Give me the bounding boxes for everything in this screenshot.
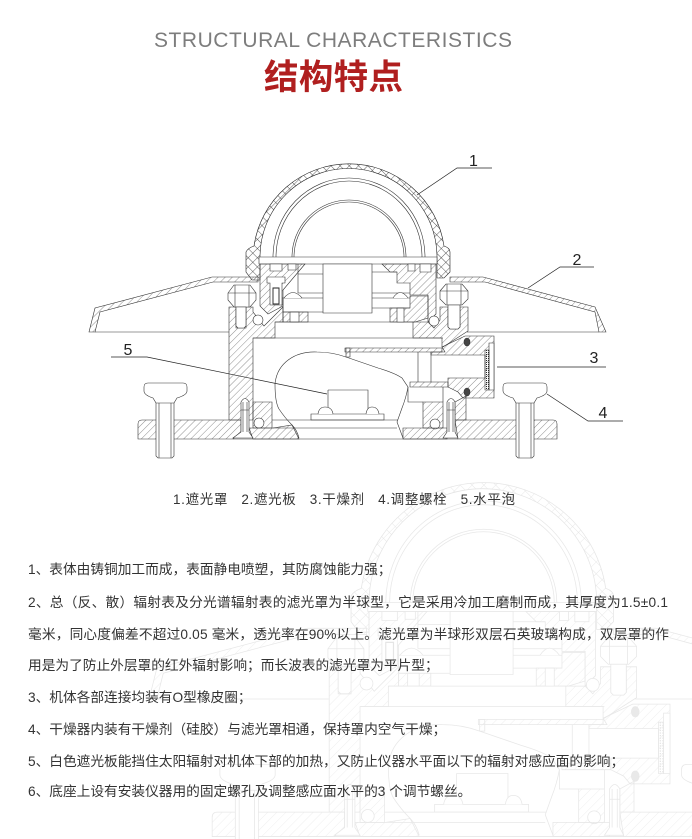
feature list: 6、底座上设有安装仪器用的固定螺孔及调整感应面水平的3 个调节螺丝。 xyxy=(28,783,471,799)
parts legend: 1.遮光罩 2.遮光板 3.干燥剂 4.调整螺栓 5.水平泡 xyxy=(173,492,515,507)
feature list xyxy=(28,562,669,799)
chinese title: 结构特点 xyxy=(264,59,403,97)
feature list: 2、总（反、散）辐射表及分光谱辐射表的滤光罩为半球型，它是采用冷加工磨制而成，其厚度为1.5±0.1 xyxy=(28,594,668,610)
background watermark drawing xyxy=(149,483,692,839)
structure cross-section diagram xyxy=(89,153,623,458)
leader 2: shade plate: 2 xyxy=(572,252,582,269)
leader 2: shade plate xyxy=(528,252,594,288)
leader 5: spirit level: 5 xyxy=(124,342,132,359)
leader 4: adjusting screw xyxy=(547,394,623,422)
feature list: 1、表体由铸铜加工而成，表面静电喷塑，其防腐蚀能力强； xyxy=(28,562,392,578)
leader 3: desiccant xyxy=(497,350,606,367)
english title: STRUCTURAL CHARACTERISTICS xyxy=(154,29,512,52)
leader 4: adjusting screw: 4 xyxy=(598,405,608,422)
leader 1: shade dome: 1 xyxy=(469,153,478,170)
feature list: 5、白色遮光板能挡住太阳辐射对机体下部的加热，又防止仪器水平面以下的辐射对感应面的影响； xyxy=(28,753,624,770)
leader 3: desiccant: 3 xyxy=(590,350,598,367)
feature list: 4、干燥器内装有干燥剂（硅胶）与滤光罩相通，保持罩内空气干燥； xyxy=(28,721,446,738)
leader 5: spirit level xyxy=(111,342,327,394)
leader 1: shade dome xyxy=(417,153,492,195)
feature list: 毫米，同心度偏差不超过0.05 毫米，透光率在90%以上。滤光罩为半球形双层石英玻璃构成，双层罩的作 xyxy=(28,626,669,642)
feature list: 用是为了防止外层罩的红外辐射影响；而长波表的滤光罩为平片型； xyxy=(28,658,439,674)
feature list: 3、机体各部连接均装有O型橡皮圈； xyxy=(28,689,252,706)
